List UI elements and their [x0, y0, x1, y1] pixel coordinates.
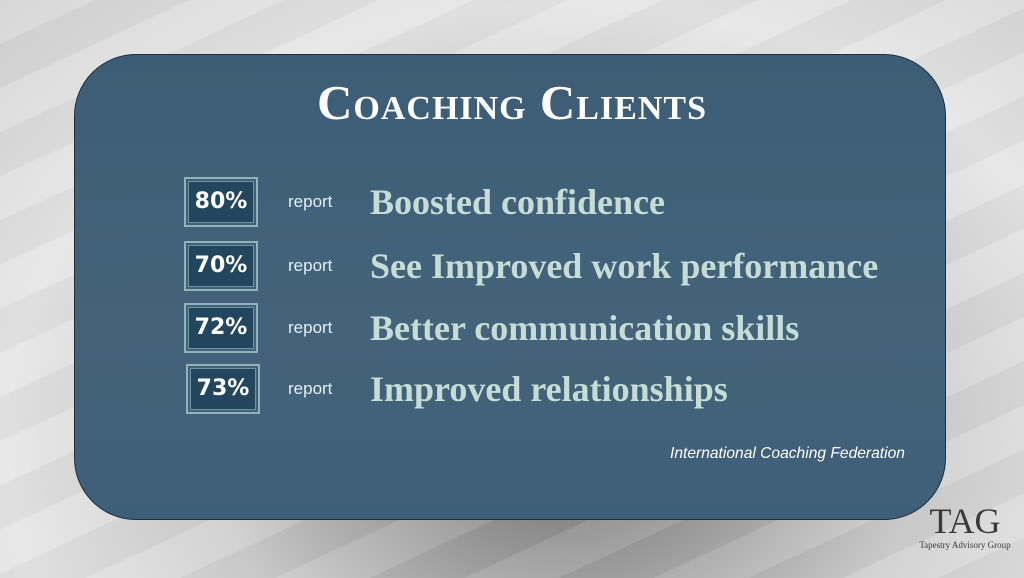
row: 73%: 73%: [197, 376, 249, 401]
title: Coaching Clients: [317, 75, 707, 130]
row: 80%: Boosted confidence: [370, 182, 665, 222]
row: 70%: [184, 241, 878, 291]
logo: Tapestry Advisory Group: [919, 540, 1011, 550]
row: 70%: 70%: [195, 253, 247, 278]
row: 80%: 80%: [195, 189, 247, 214]
panel: main: [74, 54, 946, 520]
row: 70%: report: [288, 256, 332, 275]
source: International Coaching Federation: [670, 445, 905, 462]
row: 70%: See Improved work performance: [370, 246, 878, 286]
row: 80%: [184, 177, 665, 227]
row: 72%: [184, 303, 799, 353]
row: 80%: report: [288, 192, 332, 211]
row: 72%: 72%: [195, 315, 247, 340]
row: 73%: report: [288, 379, 332, 398]
row: 73%: Improved relationships: [370, 369, 728, 409]
logo: TAG: [929, 501, 1001, 541]
row: 73%: [186, 364, 728, 414]
logo: [919, 501, 1011, 550]
row: 72%: report: [288, 318, 332, 337]
row: 72%: Better communication skills: [370, 308, 799, 348]
